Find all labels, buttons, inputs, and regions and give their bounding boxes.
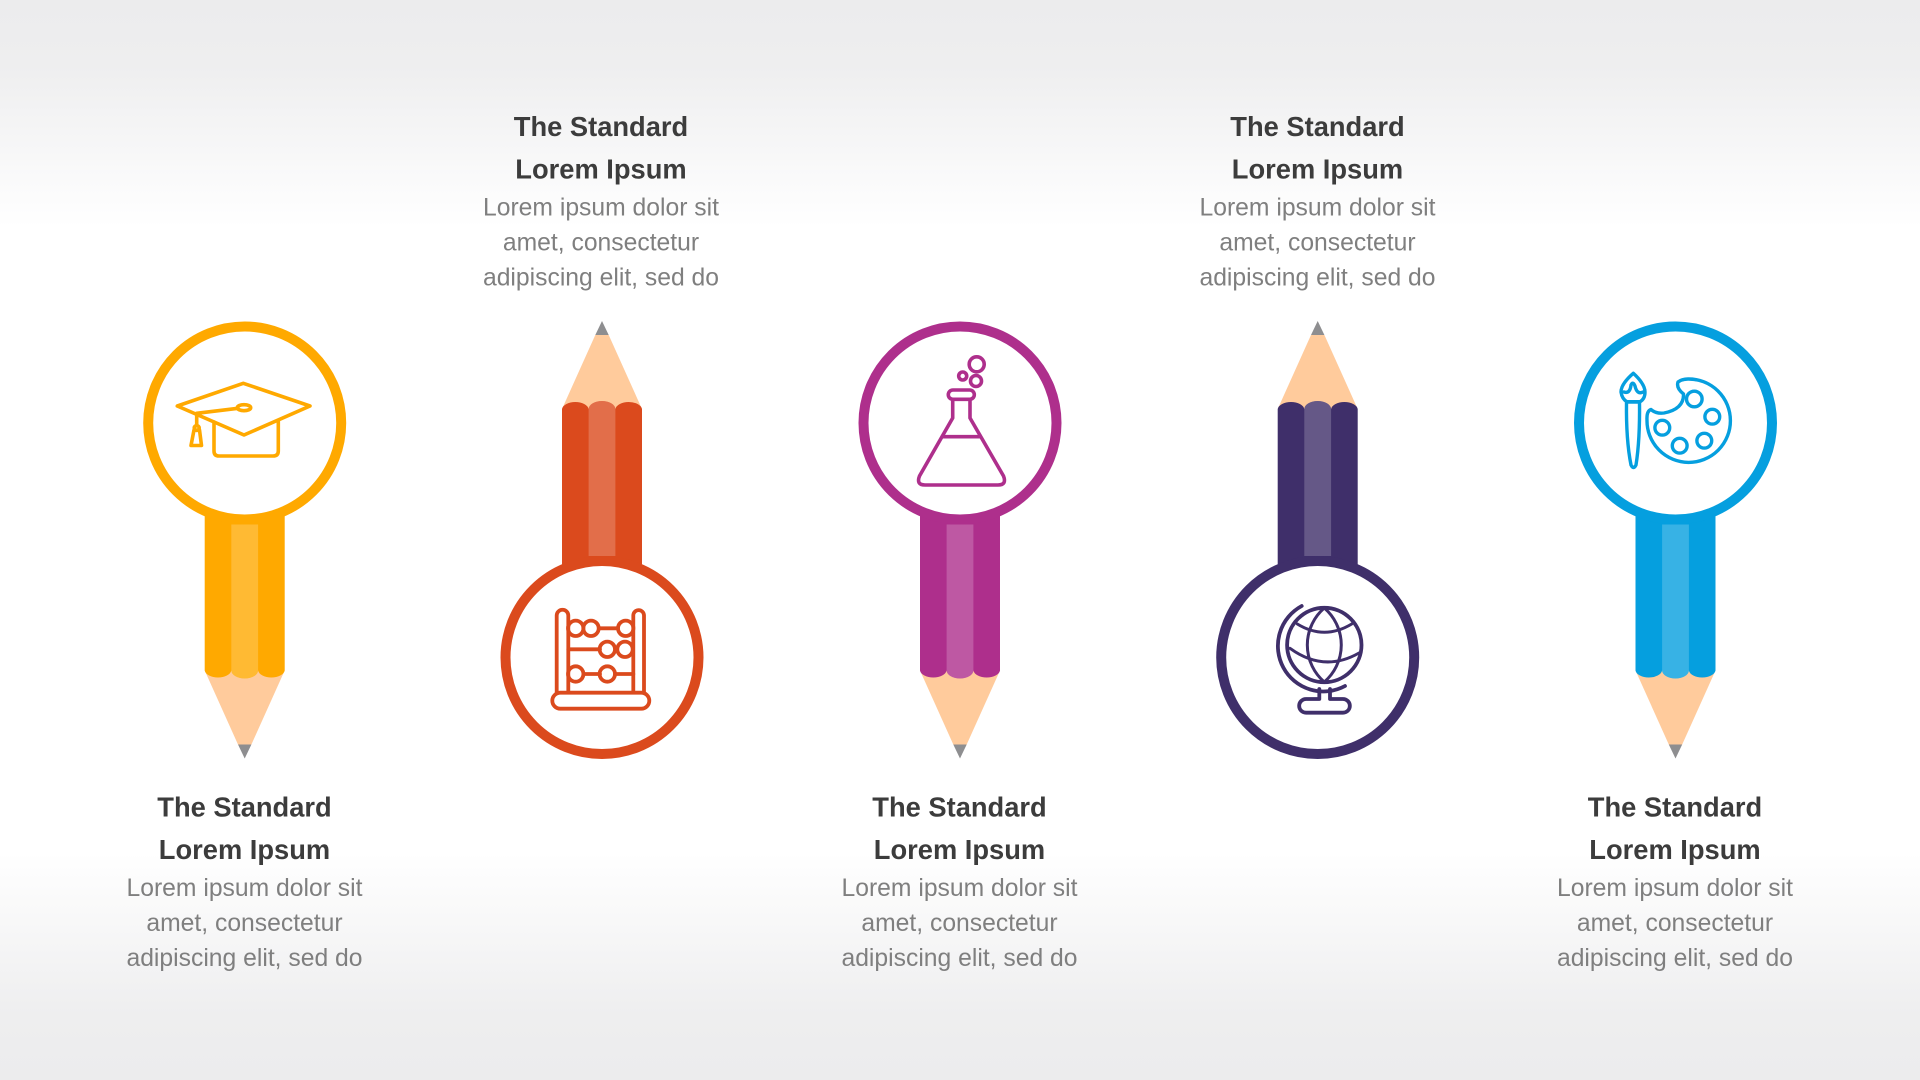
text block 1: adipiscing elit, sed do — [126, 945, 363, 972]
text block 5: Lorem ipsum dolor sit — [1557, 875, 1793, 902]
text block 1: Lorem ipsum dolor sit — [126, 875, 363, 902]
text block 3: amet, consectetur — [861, 910, 1058, 937]
pencil body red — [506, 321, 698, 754]
pencil 2: red, abacus — [506, 321, 698, 754]
pencil 4: purple, globe — [1221, 321, 1414, 754]
pencil body orange — [148, 326, 341, 758]
pencil 5: blue, palette — [1579, 326, 1772, 758]
text block 4 — [1199, 111, 1436, 292]
text block 1: amet, consectetur — [146, 910, 343, 937]
pencil body purple — [1221, 321, 1414, 754]
icon: graduation cap — [177, 383, 310, 456]
icon: globe — [1278, 606, 1362, 713]
text block 2: amet, consectetur — [503, 230, 699, 256]
text block 4: amet, consectetur — [1219, 230, 1416, 256]
pencil body blue — [1579, 326, 1772, 758]
text block 2: adipiscing elit, sed do — [483, 264, 719, 292]
text block 1 — [126, 792, 363, 972]
text block 5: Lorem Ipsum — [1589, 834, 1761, 865]
text block 2: Lorem Ipsum — [515, 154, 687, 184]
icon: flask — [919, 357, 1004, 485]
text block 4: Lorem Ipsum — [1232, 154, 1403, 184]
text block 2 — [483, 111, 719, 292]
icon: abacus — [552, 610, 649, 709]
text block 5: The Standard — [1588, 792, 1762, 822]
text block 4: The Standard — [1230, 111, 1405, 142]
text block 2: Lorem ipsum dolor sit — [483, 194, 719, 222]
text block 1: Lorem Ipsum — [159, 834, 330, 865]
text block 4: adipiscing elit, sed do — [1199, 264, 1436, 292]
text block 5 — [1557, 792, 1793, 972]
text block 3: The Standard — [872, 792, 1047, 822]
text block 1: The Standard — [157, 792, 332, 822]
pencil body magenta — [864, 326, 1056, 758]
text block 3: Lorem Ipsum — [874, 834, 1045, 865]
text block 5: amet, consectetur — [1577, 910, 1773, 937]
text block 3: adipiscing elit, sed do — [841, 945, 1078, 972]
text block 3 — [841, 792, 1078, 972]
text block 3: Lorem ipsum dolor sit — [842, 875, 1078, 902]
pencil 1: orange, graduation cap — [148, 326, 341, 758]
text block 2: The Standard — [514, 111, 688, 142]
icon: brush and palette — [1621, 373, 1730, 468]
text block 5: adipiscing elit, sed do — [1557, 945, 1793, 972]
text block 4: Lorem ipsum dolor sit — [1200, 194, 1436, 222]
pencil 3: magenta, flask — [864, 326, 1056, 758]
